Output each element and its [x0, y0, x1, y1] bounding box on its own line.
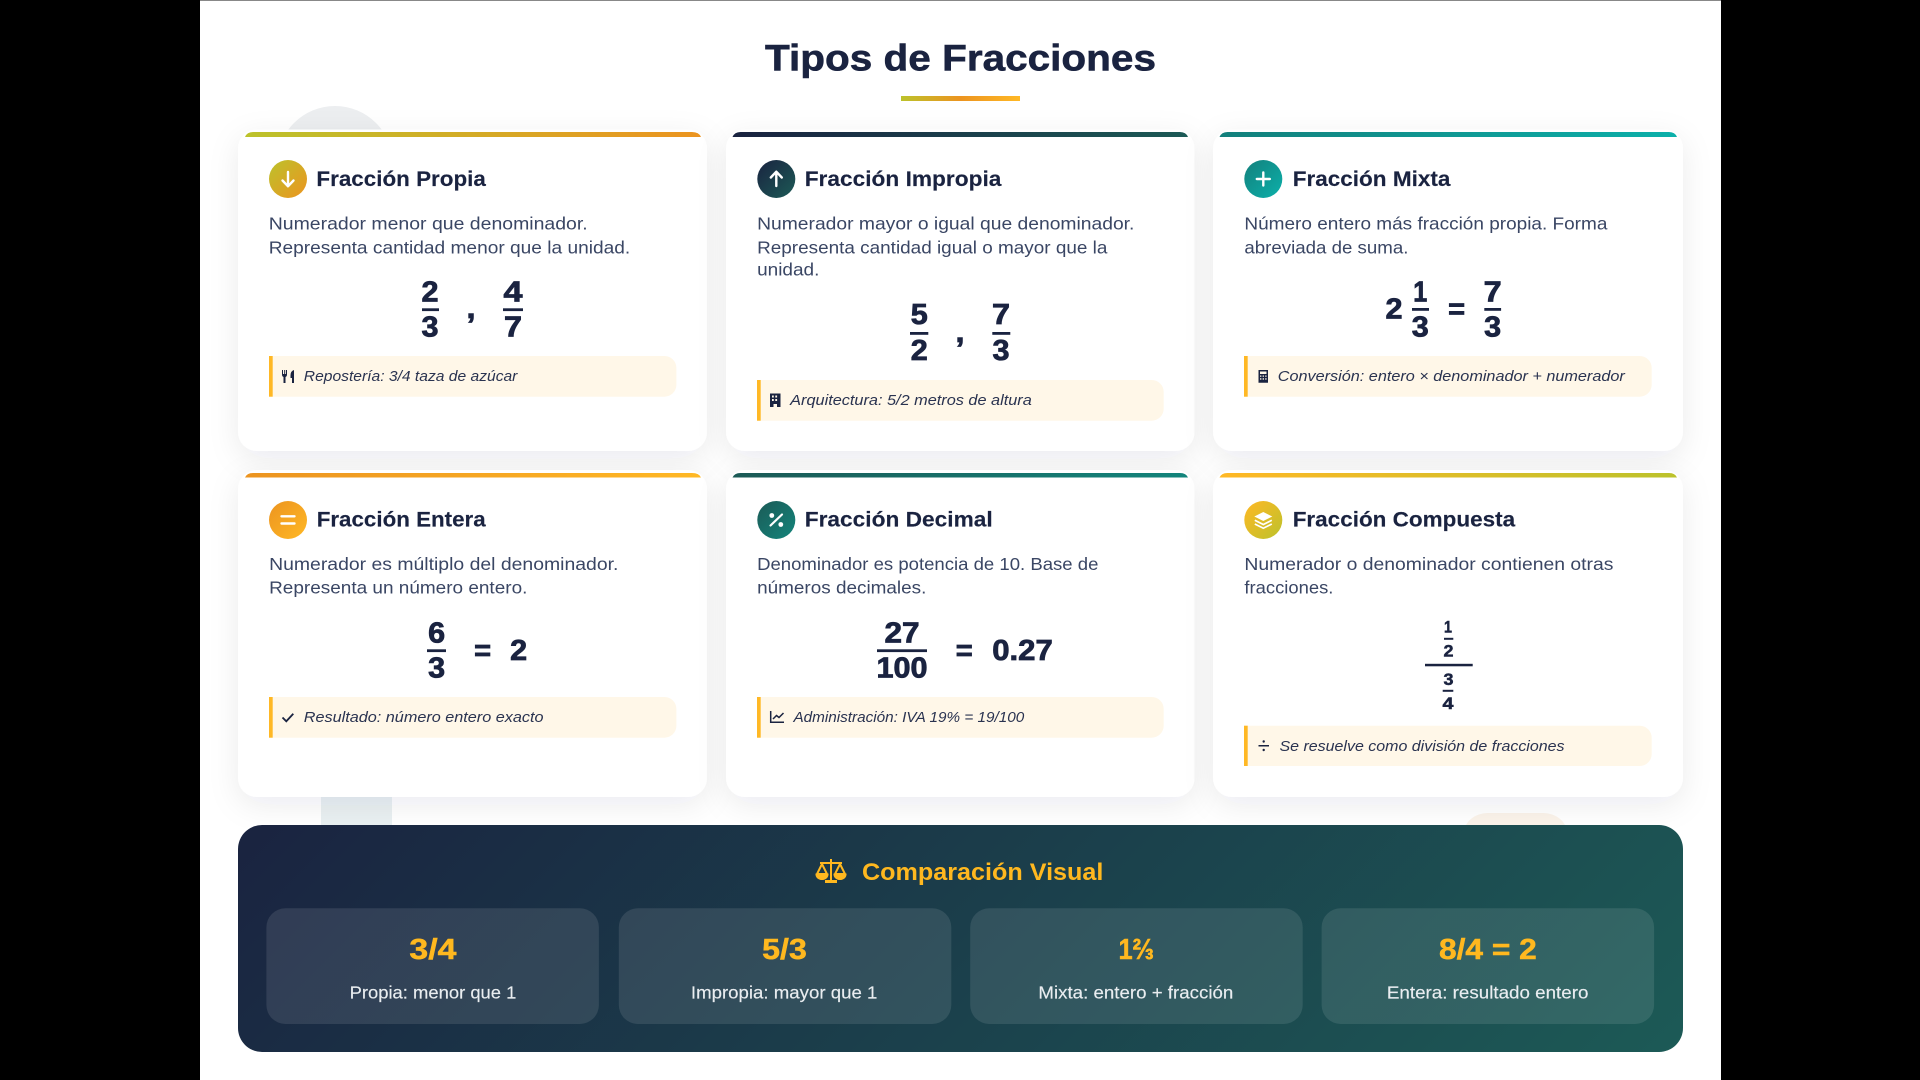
compound fraction: [1425, 618, 1473, 713]
icon: up arrow: [757, 160, 795, 198]
comparison: mixta: 1⅔: [1118, 934, 1154, 966]
comparison: propia: 3/4: [409, 934, 457, 966]
fraction formula: 27: [884, 617, 920, 649]
comparison: impropia: 5/3: [762, 934, 807, 966]
compound fraction: 1: [1444, 618, 1452, 637]
description: [1244, 213, 1608, 257]
description: Denominador es potencia de 10. Base de: [757, 554, 1098, 574]
application note: [757, 380, 1164, 421]
heading: Fracción Impropia: [805, 168, 1002, 191]
icon: layers: [1244, 501, 1282, 539]
panel: Comparación Visual: [238, 825, 1683, 1052]
description: [269, 213, 630, 258]
icon: calculator: [1258, 370, 1268, 383]
icon: plus: [1244, 160, 1282, 198]
description: Numerador menor que denominador.: [269, 213, 588, 233]
description: Numerador es múltiplo del denominador.: [269, 554, 618, 574]
fraction formula: 3: [428, 653, 445, 685]
heading: Fracción Compuesta: [1293, 509, 1515, 532]
note text: Repostería: 3/4 taza de azúcar: [304, 369, 519, 385]
fraction formula: 100: [876, 653, 928, 685]
application note: [269, 697, 676, 738]
comparison: propia: Propia: menor que 1: [350, 982, 516, 1002]
fraction examples: 7: [504, 312, 522, 344]
comparison: mixta: Mixta: entero + fracción: [1038, 982, 1233, 1002]
description: [1244, 554, 1614, 597]
page background: [200, 0, 1721, 1080]
description: fracciones.: [1244, 577, 1333, 597]
fraction examples: 4: [504, 277, 523, 309]
note text: Se resuelve como división de fracciones: [1280, 739, 1564, 755]
application note: [269, 356, 676, 397]
description: unidad.: [757, 260, 819, 280]
icon: divide: [1258, 740, 1269, 751]
fraction formula: [876, 617, 1053, 685]
description: Número entero más fracción propia. Forma: [1244, 213, 1608, 233]
note text: Conversión: entero × denominador + numerador: [1278, 369, 1626, 385]
compound fraction: 2: [1444, 642, 1454, 661]
comparison: impropia: Impropia: mayor que 1: [691, 982, 877, 1002]
compound fraction: 3: [1444, 670, 1454, 689]
heading: Fracción Decimal: [805, 509, 993, 532]
fraction formula: =: [474, 635, 491, 667]
mixed fraction formula: =: [1448, 293, 1465, 325]
fraction formula: 2: [510, 635, 527, 667]
icon: down arrow: [269, 160, 307, 198]
description: Numerador mayor o igual que denominador.: [757, 213, 1134, 233]
description: Representa cantidad igual o mayor que la: [757, 237, 1108, 257]
description: [269, 554, 618, 597]
panel: Fracción Decimal: [726, 470, 1194, 797]
comparison: entera: [1322, 908, 1654, 1024]
heading: Comparación Visual: [862, 859, 1103, 886]
description: abreviada de suma.: [1244, 237, 1408, 257]
fraction formula: 6: [428, 617, 445, 649]
fraction examples: 3: [422, 312, 438, 344]
fraction examples: 2: [911, 335, 928, 367]
icon: equals: [269, 501, 307, 539]
note text: Resultado: número entero exacto: [304, 710, 544, 726]
comparison: entera: 8/4 = 2: [1439, 934, 1537, 966]
fraction formula: 0.27: [992, 635, 1053, 667]
panel: Fracción Propia: [238, 130, 707, 451]
heading: Fracción Propia: [316, 168, 486, 191]
icon: balance scale: [816, 859, 846, 882]
application note: [757, 697, 1164, 738]
title underline: [901, 96, 1020, 101]
icon: check: [282, 714, 293, 721]
heading: Fracción Entera: [317, 509, 486, 532]
comparison: propia: [266, 908, 599, 1024]
fraction examples: 3: [992, 335, 1010, 367]
mixed fraction formula: 1: [1413, 277, 1427, 309]
mixed fraction formula: 3: [1412, 312, 1429, 344]
description: Representa cantidad menor que la unidad.: [269, 238, 630, 258]
description: números decimales.: [757, 577, 926, 597]
heading: Fracción Mixta: [1293, 168, 1451, 191]
panel: Fracción Impropia: [726, 130, 1194, 451]
mixed fraction formula: 7: [1484, 277, 1502, 309]
icon: line chart: [771, 711, 784, 722]
compound fraction: 4: [1442, 694, 1454, 713]
application note: [1244, 356, 1652, 397]
description: [757, 554, 1098, 597]
icon: percent: [757, 501, 795, 539]
mixed fraction formula: 3: [1484, 312, 1501, 344]
fraction examples: [422, 277, 523, 344]
panel: Fracción Entera: [238, 470, 707, 797]
mixed fraction formula: 2: [1386, 293, 1402, 325]
fraction examples: 7: [992, 299, 1010, 331]
application note: [1244, 726, 1652, 766]
fraction formula: =: [956, 635, 973, 667]
mixed fraction formula: [1386, 277, 1502, 344]
fraction examples: ,: [466, 293, 476, 325]
title: Tipos de Fracciones: [765, 37, 1156, 79]
note text: Administración: IVA 19% = 19/100: [792, 710, 1024, 726]
panel: Fracción Mixta: [1213, 130, 1683, 451]
fraction examples: [910, 299, 1010, 367]
description: Numerador o denominador contienen otras: [1244, 554, 1614, 574]
comparison: entera: Entera: resultado entero: [1387, 982, 1588, 1002]
panel: Fracción Compuesta: [1213, 470, 1683, 797]
comparison: mixta: [970, 908, 1303, 1024]
icon: building: [770, 394, 780, 407]
icon: utensils: [282, 370, 294, 383]
description: [757, 213, 1134, 280]
comparison: impropia: [619, 908, 951, 1024]
fraction examples: ,: [956, 317, 964, 349]
note text: Arquitectura: 5/2 metros de altura: [789, 393, 1032, 409]
fraction examples: 5: [911, 299, 928, 331]
fraction formula: [427, 617, 527, 685]
fraction examples: 2: [422, 277, 438, 309]
description: Representa un número entero.: [269, 577, 527, 597]
